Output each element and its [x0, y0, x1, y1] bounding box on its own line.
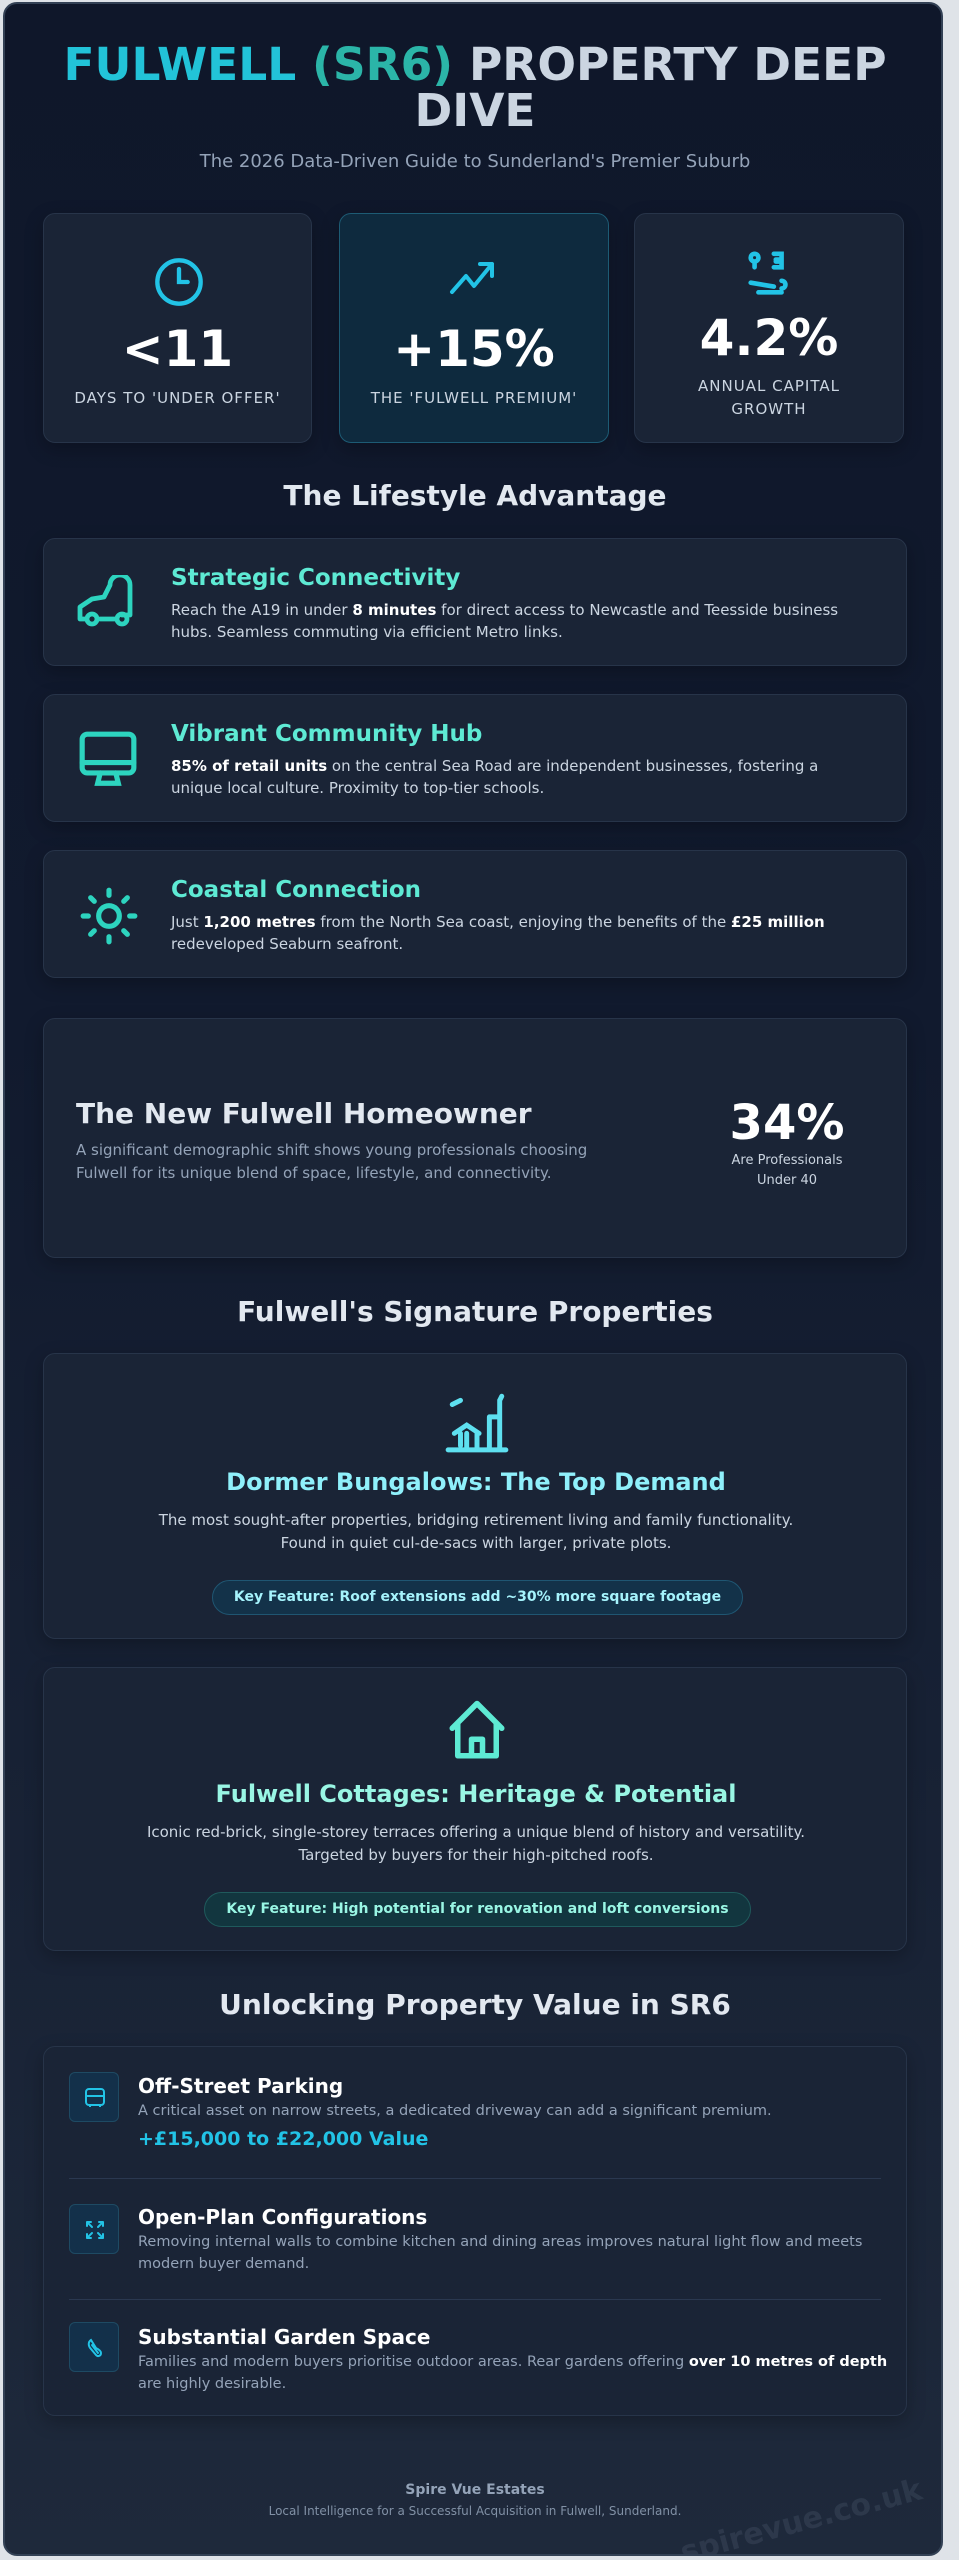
- stat: Under 40: [757, 1173, 817, 1188]
- panel: dormer: [43, 1353, 907, 1639]
- label: ANNUAL CAPITAL: [698, 377, 840, 395]
- item: open plan: [69, 2204, 862, 2272]
- title: Strategic Connectivity: [171, 565, 460, 591]
- value: +£15,000 to £22,000 Value: [138, 2128, 428, 2150]
- heading: value: Unlocking Property Value in SR6: [219, 1988, 731, 2021]
- text: Reach the A19 in under 8 minutes for direct access to Newcastle and Teesside business hubs. Seamless commuting via efficient Metro links.: [171, 601, 838, 641]
- panel: cottages: [43, 1667, 907, 1951]
- icon: monitor: [80, 732, 136, 786]
- title: Dormer Bungalows: The Top Demand: [226, 1468, 726, 1496]
- icon: expand: [69, 2204, 119, 2254]
- icon: house: [450, 1700, 504, 1758]
- title: Open-Plan Configurations: [138, 2205, 427, 2229]
- footer: Spire Vue Estates: [405, 2482, 545, 2498]
- label: THE 'FULWELL PREMIUM': [371, 389, 577, 407]
- pill: Key Feature: High potential for renovation and loft conversions: [226, 1901, 729, 1917]
- stat card: growth: [634, 213, 904, 443]
- text: Just 1,200 metres from the North Sea coast, enjoying the benefits of the £25 million redeveloped Seaburn seafront.: [171, 913, 825, 953]
- number: 4.2%: [700, 309, 838, 367]
- heading: signature: Fulwell's Signature Properties: [237, 1295, 713, 1328]
- text: Found in quiet cul-de-sacs with larger, private plots.: [281, 1534, 671, 1552]
- panel: connectivity: [43, 538, 907, 666]
- text: [158, 1511, 793, 1552]
- label: DAYS TO 'UNDER OFFER': [74, 389, 281, 407]
- panel: value list: [43, 2046, 907, 2416]
- icon: bungalow: [446, 1394, 508, 1452]
- text: Targeted by buyers for their high-pitched roofs.: [298, 1846, 654, 1864]
- text: Families and modern buyers prioritise outdoor areas. Rear gardens offering over 10 metres of depth are highly desirable.: [138, 2354, 887, 2392]
- icon: clock: [155, 258, 203, 306]
- stat card: premium: [339, 213, 609, 443]
- heading: lifestyle: The Lifestyle Advantage: [283, 479, 667, 512]
- text: A significant demographic shift shows young professionals choosing Fulwell for its unique blend of space, lifestyle, and connectivity.: [76, 1141, 587, 1182]
- item: garden: [69, 2322, 887, 2392]
- icon: sun: [80, 888, 138, 944]
- title: Substantial Garden Space: [138, 2325, 430, 2349]
- stat: 34%: [730, 1095, 844, 1151]
- item: parking: [69, 2072, 772, 2150]
- panel: homeowner: [43, 1018, 907, 1258]
- number: <11: [122, 320, 233, 378]
- icon: car: [78, 575, 132, 626]
- icon: car front: [69, 2072, 119, 2122]
- number: +15%: [393, 320, 555, 378]
- footer: [269, 2482, 681, 2518]
- label: [698, 377, 840, 418]
- text: The most sought-after properties, bridging retirement living and family functionality.: [159, 1511, 793, 1529]
- title: FULWELL (SR6) PROPERTY DEEP DIVE: [63, 38, 887, 137]
- title: The New Fulwell Homeowner: [76, 1097, 532, 1130]
- pill: [204, 1892, 751, 1927]
- title: Coastal Connection: [171, 877, 421, 903]
- icon: leaf: [69, 2322, 119, 2372]
- text: Removing internal walls to combine kitchen and dining areas improves natural light flow and meets modern buyer demand.: [138, 2234, 862, 2272]
- title: Vibrant Community Hub: [171, 721, 482, 747]
- text: Iconic red-brick, single-storey terraces offering a unique blend of history and versatility.: [147, 1823, 805, 1841]
- stat card: days: [43, 213, 312, 443]
- text: [147, 1823, 805, 1864]
- pill: Key Feature: Roof extensions add ~30% more square footage: [234, 1589, 721, 1605]
- stat: Are Professionals: [732, 1153, 842, 1168]
- panel: coastal: [43, 850, 907, 978]
- label: GROWTH: [731, 400, 807, 418]
- title: Fulwell Cottages: Heritage & Potential: [216, 1780, 736, 1808]
- title: Off-Street Parking: [138, 2074, 343, 2098]
- pill: [212, 1580, 743, 1615]
- icon: growth: [748, 252, 788, 295]
- text: 85% of retail units on the central Sea Road are independent businesses, fostering a unique local culture. Proximity to top-tier schools.: [171, 757, 818, 797]
- text: A critical asset on narrow streets, a dedicated driveway can add a significant premium.: [138, 2103, 772, 2119]
- icon: trend: [450, 262, 494, 294]
- stat: [730, 1095, 844, 1188]
- subtitle: The 2026 Data-Driven Guide to Sunderland's Premier Suburb: [200, 151, 750, 172]
- footer: Local Intelligence for a Successful Acquisition in Fulwell, Sunderland.: [269, 2504, 681, 2518]
- panel: community: [43, 694, 907, 822]
